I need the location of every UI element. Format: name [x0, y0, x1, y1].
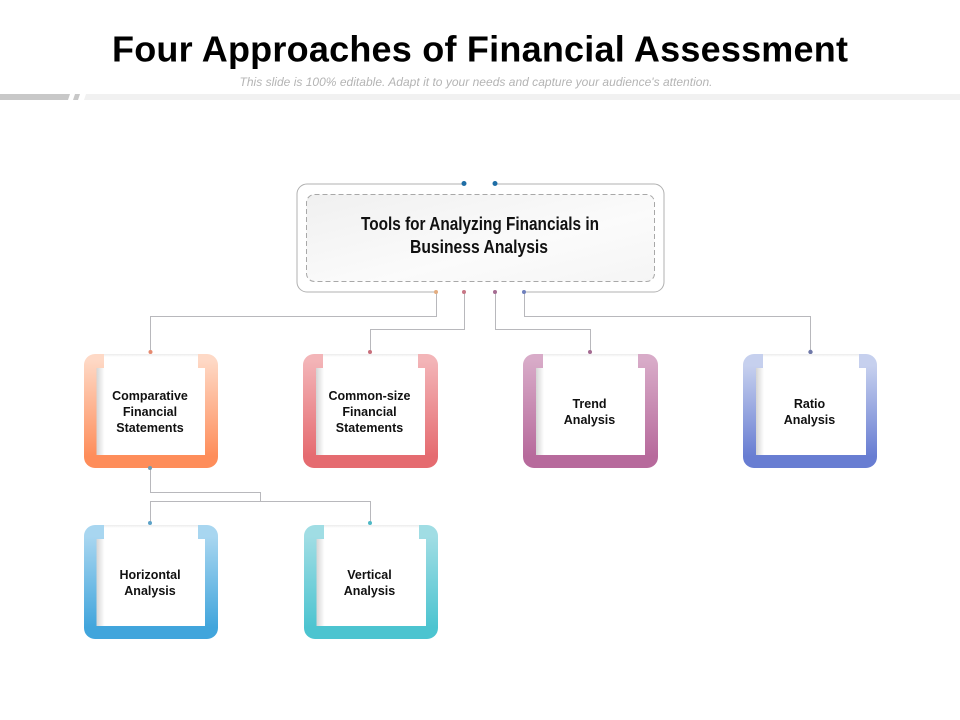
connectors from central box to top row cards [148, 181, 813, 354]
central box text [361, 214, 599, 257]
header divider bar [0, 94, 960, 100]
card: horizontal analysis [84, 525, 218, 639]
card: comparative financial statements [84, 354, 218, 468]
card: horizontal analysis: Analysis [124, 584, 176, 598]
card: trend analysis: Analysis [564, 413, 615, 427]
card: comparative financial statements: Comparative [112, 389, 188, 403]
card: vertical analysis [304, 525, 438, 639]
card: ratio analysis: Analysis [784, 413, 835, 427]
connectors to second row cards [148, 466, 372, 525]
card: vertical analysis: Vertical [347, 568, 392, 582]
card: common-size financial statements [303, 354, 438, 468]
card: trend analysis [523, 354, 658, 468]
card: trend analysis: Trend [572, 397, 607, 411]
card: common-size financial statements: Common-size [329, 389, 411, 403]
card: comparative financial statements: Statements [116, 421, 184, 435]
central box text: Tools for Analyzing Financials in [361, 214, 599, 234]
subtitle: This slide is 100% editable. Adapt it to your needs and capture your audience's attention. [240, 75, 712, 89]
title: Four Approaches of Financial Assessment [112, 28, 848, 70]
card: ratio analysis [743, 354, 877, 468]
card: ratio analysis: Ratio [794, 397, 825, 411]
card: vertical analysis: Analysis [344, 584, 395, 598]
central box text: Business Analysis [410, 237, 548, 257]
card: common-size financial statements: Statements [336, 421, 403, 435]
card: horizontal analysis: Horizontal [119, 568, 181, 582]
central box: tools for analyzing financials [297, 184, 664, 292]
card: comparative financial statements: Financial [123, 405, 177, 419]
card: common-size financial statements: Financial [342, 405, 397, 419]
